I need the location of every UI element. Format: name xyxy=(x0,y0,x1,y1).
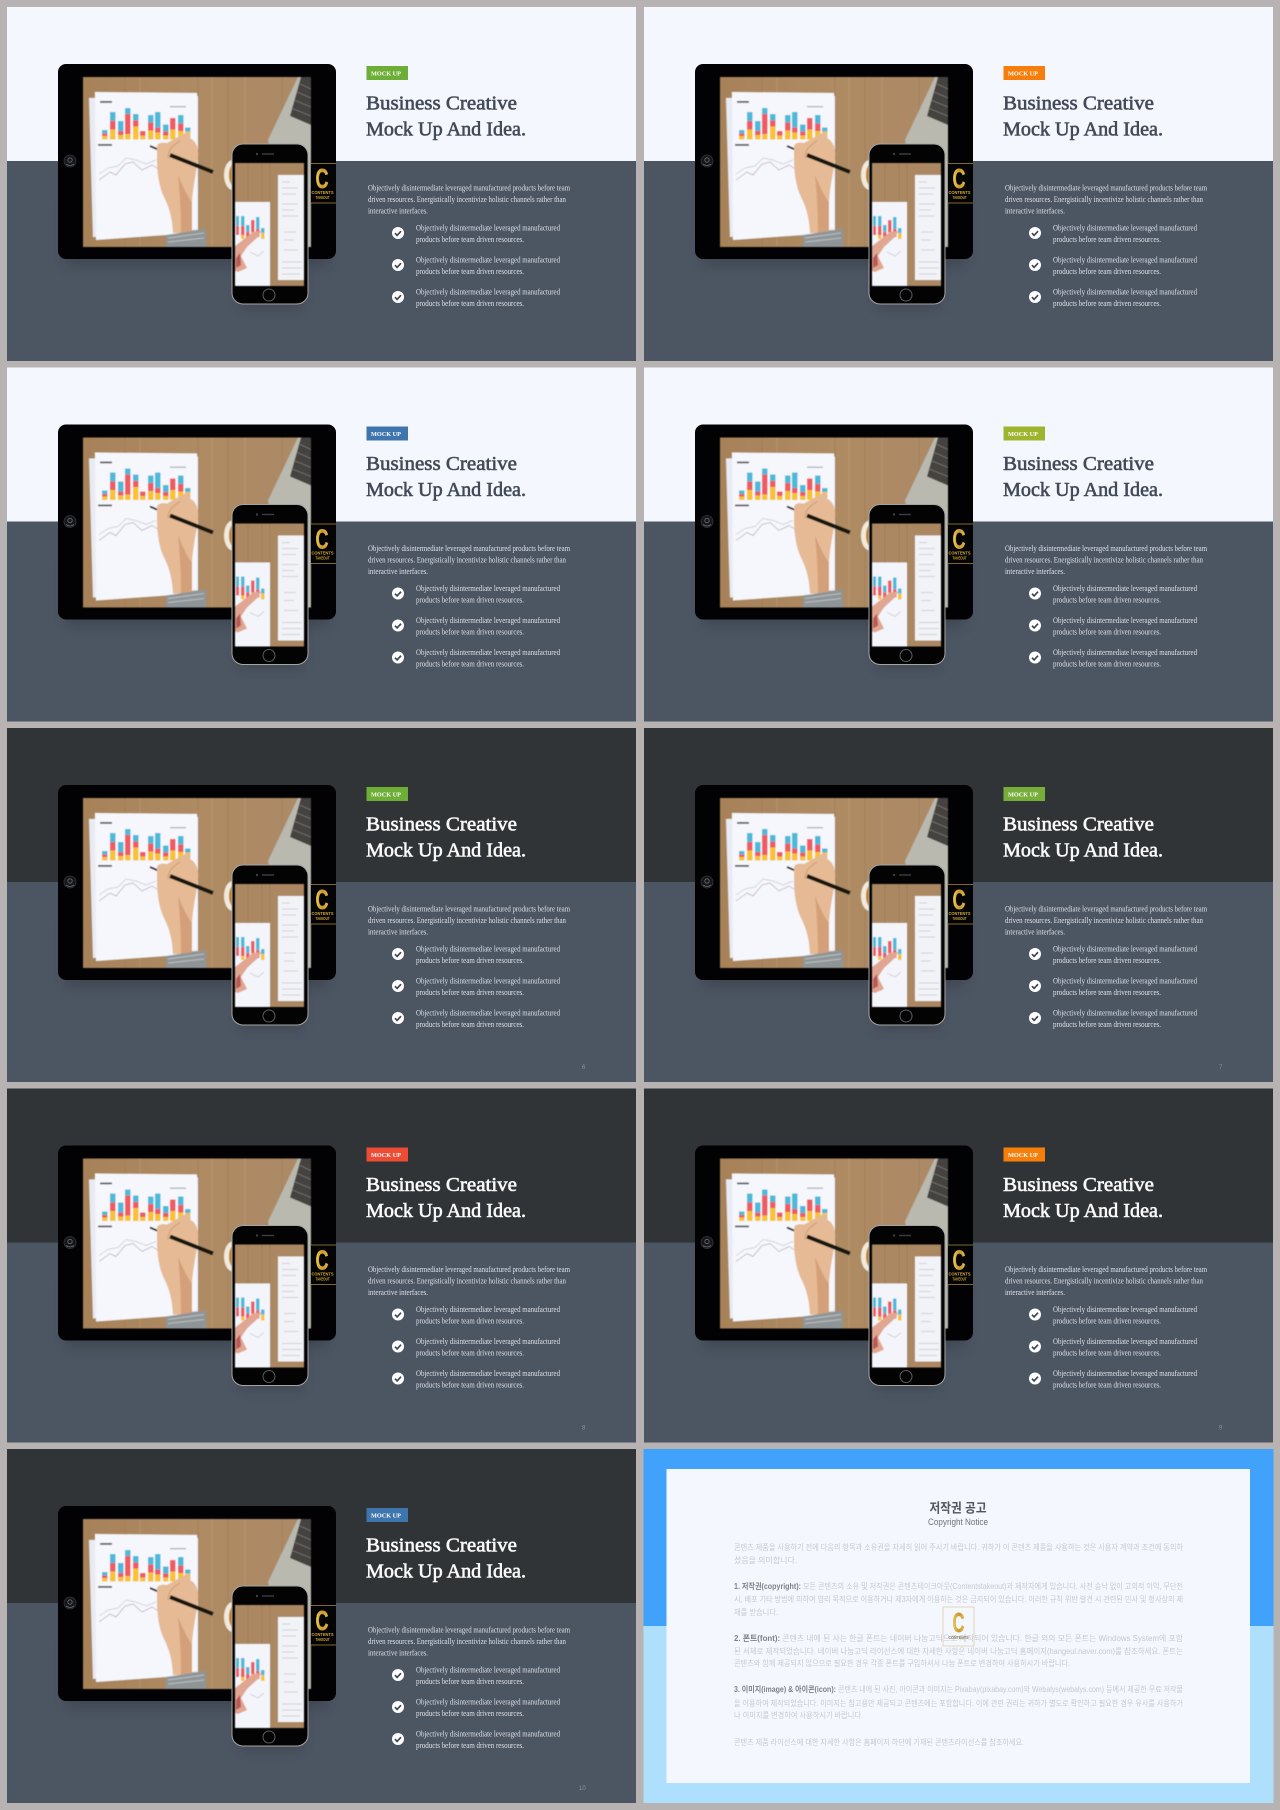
checklist: Objectively disintermediate leveraged manufactured xyxy=(416,1730,560,1738)
slide background xyxy=(7,7,636,361)
white card xyxy=(666,1469,1250,1783)
logo badge: CONTENTS xyxy=(948,911,971,917)
paragraph: Objectively disintermediate leveraged manufactured products before team xyxy=(368,1626,571,1634)
tablet and phone mockup xyxy=(695,785,973,1029)
checklist: products before team driven resources. xyxy=(416,235,524,244)
title: Business Creative xyxy=(366,814,517,836)
notice body text: 콘텐츠 제품 라이선스에 대한 자세한 사항은 홈페이지 하단에 기재된 콘텐츠라이선스를 참조하세요. xyxy=(734,1737,1024,1747)
title: Business Creative xyxy=(366,1174,517,1196)
checklist: Objectively disintermediate leveraged manufactured xyxy=(416,1337,560,1346)
paragraph: driven resources. Energistically incentivize holistic channels rather than xyxy=(1005,195,1203,204)
watermark logo: CONTENTS xyxy=(948,1635,969,1641)
title: Mock Up And Idea. xyxy=(1003,840,1163,862)
paragraph xyxy=(368,1265,571,1297)
notice body text: 3. 이미지(image) & 아이콘(icon): 콘텐츠 내에 된 사진, 아이콘과 이미지는 Pixabay(pixabay.com)와 Webalys(webalys.com) 등에서 제공한 무료 저작물 xyxy=(734,1684,1183,1694)
checklist xyxy=(1029,944,1197,1029)
title xyxy=(1003,453,1163,501)
checklist: Objectively disintermediate leveraged manufactured xyxy=(1053,616,1197,625)
tag xyxy=(366,1508,408,1522)
logo badge: TAKEOUT xyxy=(952,195,967,201)
title: Business Creative xyxy=(366,1534,517,1556)
checklist: products before team driven resources. xyxy=(416,956,524,965)
checklist: Objectively disintermediate leveraged manufactured xyxy=(416,1369,560,1378)
notice body text: 셨음을 의미합니다. xyxy=(734,1555,797,1565)
tag xyxy=(1004,66,1045,80)
copyright heading: 저작권 공고 xyxy=(930,1500,987,1516)
title xyxy=(1003,1174,1163,1222)
tag xyxy=(1004,787,1045,801)
paragraph: driven resources. Energistically incentivize holistic channels rather than xyxy=(1005,1276,1203,1286)
logo badge: CONTENTS xyxy=(948,190,971,196)
logo badge: CONTENTS xyxy=(312,190,334,196)
notice body text: 콘텐츠와 함께 제공되지 않으므로 필요한 경우 각종 폰트를 구입하셔서 나눔 폰트로 변경하여 사용하시기 바랍니다. xyxy=(734,1658,1070,1668)
checklist: products before team driven resources. xyxy=(1053,596,1161,604)
title xyxy=(366,453,526,501)
logo badge xyxy=(311,524,336,564)
logo badge xyxy=(948,163,973,203)
logo badge: C xyxy=(952,1244,966,1276)
slide background xyxy=(644,1449,1274,1803)
paragraph: interactive interfaces. xyxy=(368,1288,428,1297)
paragraph xyxy=(1005,184,1208,216)
checklist: products before team driven resources. xyxy=(416,596,524,604)
paragraph: Objectively disintermediate leveraged manufactured products before team xyxy=(368,544,571,553)
paragraph: interactive interfaces. xyxy=(1005,928,1065,936)
tag: MOCK UP xyxy=(1008,70,1038,78)
logo badge: C xyxy=(316,163,328,194)
slide background xyxy=(644,7,1273,361)
tag xyxy=(366,1148,408,1162)
logo badge: TAKEOUT xyxy=(316,916,330,922)
checklist: Objectively disintermediate leveraged manufactured xyxy=(1053,1337,1197,1346)
logo badge: TAKEOUT xyxy=(316,1637,330,1643)
slide background xyxy=(7,728,636,1082)
paragraph: interactive interfaces. xyxy=(368,1648,428,1658)
tag: MOCK UP xyxy=(371,431,401,438)
title xyxy=(366,92,526,140)
slide background xyxy=(644,368,1273,722)
title: Business Creative xyxy=(366,453,517,475)
checklist xyxy=(1029,224,1197,308)
title: Mock Up And Idea. xyxy=(366,840,526,862)
logo badge: C xyxy=(952,884,966,915)
checklist: products before team driven resources. xyxy=(1053,1020,1161,1029)
slide background xyxy=(7,368,636,722)
tag: MOCK UP xyxy=(1008,1152,1038,1159)
paragraph: Objectively disintermediate leveraged manufactured products before team xyxy=(1005,904,1208,914)
paragraph: Objectively disintermediate leveraged manufactured products before team xyxy=(1005,544,1208,553)
slide background xyxy=(7,1088,636,1442)
tag xyxy=(366,66,408,80)
title xyxy=(1003,814,1163,862)
paragraph: interactive interfaces. xyxy=(368,206,428,216)
page number: 8 xyxy=(582,1426,586,1432)
title: Mock Up And Idea. xyxy=(366,1200,526,1222)
checklist xyxy=(1029,1305,1197,1390)
tag xyxy=(366,426,408,440)
panel: slide 1 xyxy=(7,7,636,361)
checklist: Objectively disintermediate leveraged manufactured xyxy=(416,944,560,954)
paragraph: driven resources. Energistically incentivize holistic channels rather than xyxy=(368,916,566,925)
title: Business Creative xyxy=(1003,92,1154,114)
notice body text: 나 이미지를 변경하여 사용하시기 바랍니다. xyxy=(734,1710,863,1720)
checklist: products before team driven resources. xyxy=(416,299,524,308)
checklist: products before team driven resources. xyxy=(1053,299,1161,308)
logo badge: CONTENTS xyxy=(312,1632,334,1638)
checklist: products before team driven resources. xyxy=(416,267,524,276)
title: Business Creative xyxy=(366,92,517,114)
panel: slide 4 xyxy=(644,368,1273,722)
paragraph: Objectively disintermediate leveraged manufactured products before team xyxy=(368,904,571,914)
checklist xyxy=(392,1666,560,1750)
checklist: Objectively disintermediate leveraged manufactured xyxy=(416,256,560,264)
checklist: products before team driven resources. xyxy=(416,1020,524,1029)
notice body text: 을 이용하여 제작되었습니다. 이미지는 참고용만 제공되고 콘텐츠에는 포함합니다. 이에 관련 권리는 귀하가 별도로 확인하고 필요한 경우 유사를 사용하거 xyxy=(734,1698,1183,1708)
checklist: products before team driven resources. xyxy=(416,660,524,668)
paragraph xyxy=(1005,904,1208,936)
panel: slide 9 xyxy=(7,1449,636,1803)
paragraph xyxy=(368,904,571,936)
paragraph: interactive interfaces. xyxy=(1005,1288,1065,1297)
paragraph: driven resources. Energistically incentivize holistic channels rather than xyxy=(1005,916,1203,925)
tablet and phone mockup xyxy=(58,1146,336,1390)
checklist: products before team driven resources. xyxy=(1053,1316,1161,1326)
checklist xyxy=(392,944,560,1029)
logo badge: TAKEOUT xyxy=(316,1276,330,1282)
checklist xyxy=(392,224,560,308)
logo badge xyxy=(948,1244,973,1284)
logo badge xyxy=(311,884,336,924)
title: Mock Up And Idea. xyxy=(366,479,526,501)
title: Mock Up And Idea. xyxy=(1003,118,1163,140)
logo badge: C xyxy=(952,163,966,194)
panel: slide 2 xyxy=(644,7,1273,361)
logo badge: C xyxy=(316,1244,328,1276)
logo badge: C xyxy=(316,524,328,554)
tag xyxy=(1004,1148,1045,1162)
panel: copyright notice slide xyxy=(644,1449,1274,1803)
tag: MOCK UP xyxy=(371,792,401,798)
logo badge: TAKEOUT xyxy=(952,916,967,922)
logo badge xyxy=(948,524,973,564)
paragraph: driven resources. Energistically incentivize holistic channels rather than xyxy=(1005,556,1203,564)
slide background xyxy=(644,728,1273,1082)
page number: 7 xyxy=(1219,1065,1223,1071)
logo badge: CONTENTS xyxy=(312,911,334,917)
logo badge xyxy=(311,163,336,203)
logo badge: TAKEOUT xyxy=(316,195,330,201)
checklist: Objectively disintermediate leveraged manufactured xyxy=(1053,224,1197,232)
logo badge: CONTENTS xyxy=(312,1272,334,1278)
paragraph xyxy=(1005,544,1208,576)
tablet and phone mockup xyxy=(695,1146,973,1390)
logo badge: C xyxy=(952,524,966,554)
title xyxy=(366,814,526,862)
title: Mock Up And Idea. xyxy=(366,118,526,140)
paragraph: Objectively disintermediate leveraged manufactured products before team xyxy=(368,184,571,192)
checklist: products before team driven resources. xyxy=(416,1677,524,1686)
checklist: products before team driven resources. xyxy=(416,988,524,997)
paragraph xyxy=(1005,1265,1208,1297)
tablet and phone mockup xyxy=(695,64,973,308)
checklist: products before team driven resources. xyxy=(1053,956,1161,965)
title xyxy=(1003,92,1163,140)
title: Business Creative xyxy=(1003,1174,1154,1196)
tag: MOCK UP xyxy=(1008,792,1038,798)
watermark logo xyxy=(943,1607,974,1646)
checklist: Objectively disintermediate leveraged manufactured xyxy=(416,584,560,593)
checklist xyxy=(392,584,560,668)
checklist xyxy=(392,1305,560,1390)
logo badge: CONTENTS xyxy=(948,1272,971,1278)
checklist: Objectively disintermediate leveraged manufactured xyxy=(1053,1369,1197,1378)
slide background xyxy=(644,1088,1273,1442)
notice body text: 된 서체로 제작되었습니다. 네이버 나눔고딕 라이선스에 대한 자세한 사항은 네이버 나눔고딕 홈페이지(hangeul.naver.com)를 참조하세요. 폰트는 xyxy=(734,1646,1183,1656)
logo badge xyxy=(948,884,973,924)
paragraph: driven resources. Energistically incentivize holistic channels rather than xyxy=(368,1276,566,1286)
checklist: Objectively disintermediate leveraged manufactured xyxy=(1053,1008,1197,1018)
paragraph: driven resources. Energistically incentivize holistic channels rather than xyxy=(368,195,566,204)
paragraph: driven resources. Energistically incentivize holistic channels rather than xyxy=(368,556,566,564)
checklist: Objectively disintermediate leveraged manufactured xyxy=(1053,288,1197,296)
logo badge xyxy=(311,1605,336,1645)
panel: slide 8 xyxy=(644,1088,1273,1442)
checklist: Objectively disintermediate leveraged manufactured xyxy=(416,224,560,232)
checklist: products before team driven resources. xyxy=(416,1348,524,1358)
paragraph: Objectively disintermediate leveraged manufactured products before team xyxy=(1005,184,1208,192)
page number: 10 xyxy=(579,1786,586,1792)
checklist: Objectively disintermediate leveraged manufactured xyxy=(1053,976,1197,986)
logo badge: TAKEOUT xyxy=(952,1276,967,1282)
page number: 6 xyxy=(582,1065,586,1071)
checklist: products before team driven resources. xyxy=(1053,267,1161,276)
tablet and phone mockup xyxy=(58,1506,336,1750)
panel: slide 7 xyxy=(7,1088,636,1442)
paragraph: interactive interfaces. xyxy=(1005,567,1065,576)
paragraph: Objectively disintermediate leveraged manufactured products before team xyxy=(1005,1265,1208,1274)
checklist: products before team driven resources. xyxy=(416,1316,524,1326)
checklist: Objectively disintermediate leveraged manufactured xyxy=(416,648,560,657)
page number: 9 xyxy=(1219,1426,1223,1432)
logo badge: CONTENTS xyxy=(948,550,971,556)
watermark logo: C xyxy=(952,1607,964,1638)
title: Business Creative xyxy=(1003,814,1154,836)
tag: MOCK UP xyxy=(371,1512,401,1520)
notice body text: 콘텐츠 제품을 사용하기 전에 다음의 항목과 소유권을 자세히 읽어 주시기 바랍니다. 귀하가 이 콘텐츠 제품을 사용하는 것은 사용자 계약과 조건에 동의하 xyxy=(734,1542,1184,1552)
notice body text xyxy=(734,1542,1184,1747)
checklist: products before team driven resources. xyxy=(416,1380,524,1390)
checklist: Objectively disintermediate leveraged manufactured xyxy=(1053,1305,1197,1314)
checklist: Objectively disintermediate leveraged manufactured xyxy=(416,976,560,986)
paragraph xyxy=(368,1626,571,1658)
checklist: Objectively disintermediate leveraged manufactured xyxy=(1053,944,1197,954)
tag: MOCK UP xyxy=(371,70,401,78)
logo badge xyxy=(311,1244,336,1284)
checklist: Objectively disintermediate leveraged manufactured xyxy=(416,288,560,296)
tablet and phone mockup xyxy=(58,64,336,308)
checklist: Objectively disintermediate leveraged manufactured xyxy=(416,1008,560,1018)
checklist: Objectively disintermediate leveraged manufactured xyxy=(416,616,560,625)
paragraph xyxy=(368,184,571,216)
tablet and phone mockup xyxy=(58,424,336,668)
checklist: products before team driven resources. xyxy=(1053,628,1161,636)
checklist: Objectively disintermediate leveraged manufactured xyxy=(416,1666,560,1674)
checklist: Objectively disintermediate leveraged manufactured xyxy=(416,1698,560,1706)
checklist: products before team driven resources. xyxy=(416,628,524,636)
checklist: products before team driven resources. xyxy=(1053,988,1161,997)
panel: slide 5 xyxy=(7,728,636,1082)
notice body text: 시, 배포 기타 방법에 의하여 영리 목적으로 이용하거나 제3자에게 이용하는 것은 금지되어 있습니다. 이러한 규칙 위반 발견 시 관련된 민사 및 형사상의 제 xyxy=(734,1594,1183,1604)
title xyxy=(366,1534,526,1582)
paragraph xyxy=(368,544,571,576)
checklist xyxy=(1029,584,1197,668)
paragraph: interactive interfaces. xyxy=(368,567,428,576)
paragraph: Objectively disintermediate leveraged manufactured products before team xyxy=(368,1265,571,1274)
paragraph: driven resources. Energistically incentivize holistic channels rather than xyxy=(368,1637,566,1646)
checklist: Objectively disintermediate leveraged manufactured xyxy=(1053,256,1197,264)
tag: MOCK UP xyxy=(371,1152,401,1159)
logo badge: TAKEOUT xyxy=(952,556,967,562)
checklist: products before team driven resources. xyxy=(416,1709,524,1718)
notice body text: 1. 저작권(copyright): 모든 콘텐츠의 소유 및 저작권은 콘텐츠테이크아웃(Contentstakeout)과 제작자에게 있습니다. 사전 승낙 없이 고의적 이익, 무단전 xyxy=(734,1581,1183,1591)
title: Mock Up And Idea. xyxy=(1003,1200,1163,1222)
copyright subheading: Copyright Notice xyxy=(928,1517,988,1527)
checklist: products before team driven resources. xyxy=(1053,1348,1161,1358)
logo badge: CONTENTS xyxy=(312,550,334,556)
paragraph: interactive interfaces. xyxy=(368,928,428,936)
title: Mock Up And Idea. xyxy=(1003,479,1163,501)
logo badge: C xyxy=(316,1605,328,1636)
notice body text: 2. 폰트(font): 콘텐츠 내에 된 사는 한글 폰트는 네이버 나눔고딕으로 제작되어 있습니다. 한글 외의 모든 폰트는 Windows System에 포함 xyxy=(734,1633,1184,1643)
checklist: products before team driven resources. xyxy=(1053,660,1161,668)
tablet and phone mockup xyxy=(695,424,973,668)
logo badge: C xyxy=(316,884,328,915)
notice body text: 재를 받습니다. xyxy=(734,1607,778,1617)
checklist: products before team driven resources. xyxy=(416,1741,524,1750)
paragraph: interactive interfaces. xyxy=(1005,206,1065,216)
slide background xyxy=(7,1449,636,1803)
checklist: products before team driven resources. xyxy=(1053,1380,1161,1390)
checklist: Objectively disintermediate leveraged manufactured xyxy=(416,1305,560,1314)
checklist: Objectively disintermediate leveraged manufactured xyxy=(1053,584,1197,593)
tag: MOCK UP xyxy=(1008,431,1038,438)
checklist: Objectively disintermediate leveraged manufactured xyxy=(1053,648,1197,657)
title: Mock Up And Idea. xyxy=(366,1560,526,1582)
checklist: products before team driven resources. xyxy=(1053,235,1161,244)
tag xyxy=(366,787,408,801)
tag xyxy=(1004,426,1045,440)
logo badge: TAKEOUT xyxy=(316,556,330,562)
title xyxy=(366,1174,526,1222)
panel: slide 3 xyxy=(7,368,636,722)
panel: slide 6 xyxy=(644,728,1273,1082)
tablet and phone mockup xyxy=(58,785,336,1029)
title: Business Creative xyxy=(1003,453,1154,475)
